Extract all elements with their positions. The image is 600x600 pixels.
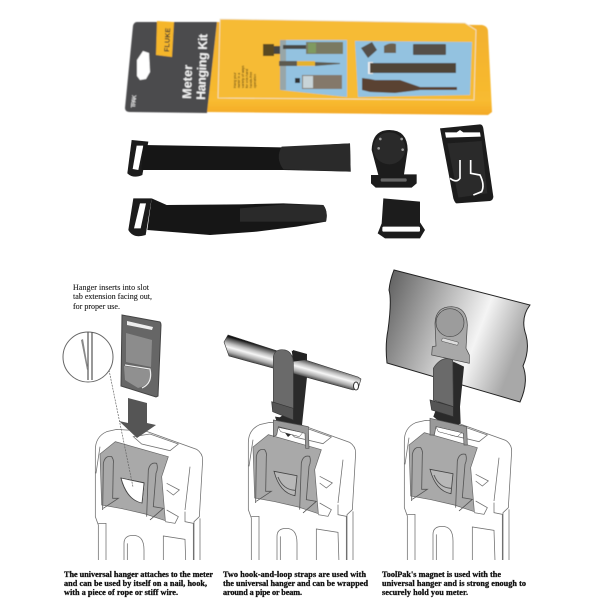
blue photo panel left: [263, 40, 347, 97]
white cutout window: [121, 478, 144, 503]
arrow down into slot: [119, 398, 156, 438]
caption: straps: the universal hanger and can be wrapped: [223, 579, 368, 588]
long hook-and-loop strap: [127, 140, 351, 177]
card code: TPAK: [131, 94, 138, 108]
card description: Hang your: [233, 71, 237, 88]
magnet and strap: [430, 307, 469, 445]
FLUKE logo tab: [156, 21, 174, 57]
photo of kit parts: [127, 124, 493, 238]
meter with hanger: [404, 420, 512, 561]
card title line 2: Hanging Kit: [194, 33, 210, 100]
caption: magnet: securely hold you meter.: [382, 588, 468, 597]
card description: [233, 65, 257, 88]
back of strap: [276, 350, 307, 437]
card description: hands-free: [249, 72, 253, 88]
caption: universal hanger: [64, 570, 213, 597]
magnet mount: [371, 130, 417, 188]
caption: magnet: [382, 570, 526, 597]
hang hole: [137, 51, 150, 80]
detail callout circle: [63, 332, 133, 487]
pipe: [224, 335, 361, 390]
card description: variety of ways: [241, 65, 245, 88]
strap over pipe: [272, 350, 309, 448]
dark header panel: [125, 22, 217, 113]
caption: straps: around a pipe or beam.: [223, 588, 302, 597]
short hook-and-loop strap: [128, 198, 327, 236]
product package card: [125, 19, 492, 115]
panel: magnet on steel plate: [386, 270, 530, 561]
card description: meter in a: [237, 73, 241, 88]
caption: universal hanger: and can be used by itself on a nail, hook,: [64, 579, 207, 588]
caption: straps: Two hook-and-loop straps are used with: [223, 570, 366, 579]
instruction note: for proper use.: [73, 302, 120, 311]
hanger illustration: [121, 315, 161, 397]
clear blister highlight: [218, 19, 476, 100]
meter outline: [95, 429, 203, 570]
caption: magnet: universal hanger and is strong enough to: [382, 579, 526, 588]
panel: strap around pipe: [224, 335, 361, 563]
caption: straps: [223, 570, 368, 597]
instruction note: Hanger inserts into slot: [73, 283, 150, 292]
caption: universal hanger: The universal hanger attaches to the meter: [64, 570, 213, 579]
FLUKE logo tab: FLUKE: [164, 27, 172, 52]
caption: universal hanger: with a piece of rope or stiff wire.: [64, 588, 178, 597]
instruction note: tab extension facing out,: [73, 292, 152, 301]
blue photo panel right: [355, 41, 472, 97]
card description: for one-hand: [245, 69, 249, 88]
panel: hanger inserts into meter: [63, 283, 203, 570]
universal hanger: [440, 124, 493, 203]
instruction note: [73, 283, 152, 311]
meter with hanger: [248, 422, 356, 563]
card title: Meter: [180, 65, 195, 99]
caption: magnet: ToolPak's magnet is used with the: [382, 570, 501, 579]
strap clip: [378, 198, 425, 238]
yellow card backing: [207, 22, 492, 115]
card description: operation: [253, 74, 257, 88]
steel plate: [386, 270, 530, 402]
